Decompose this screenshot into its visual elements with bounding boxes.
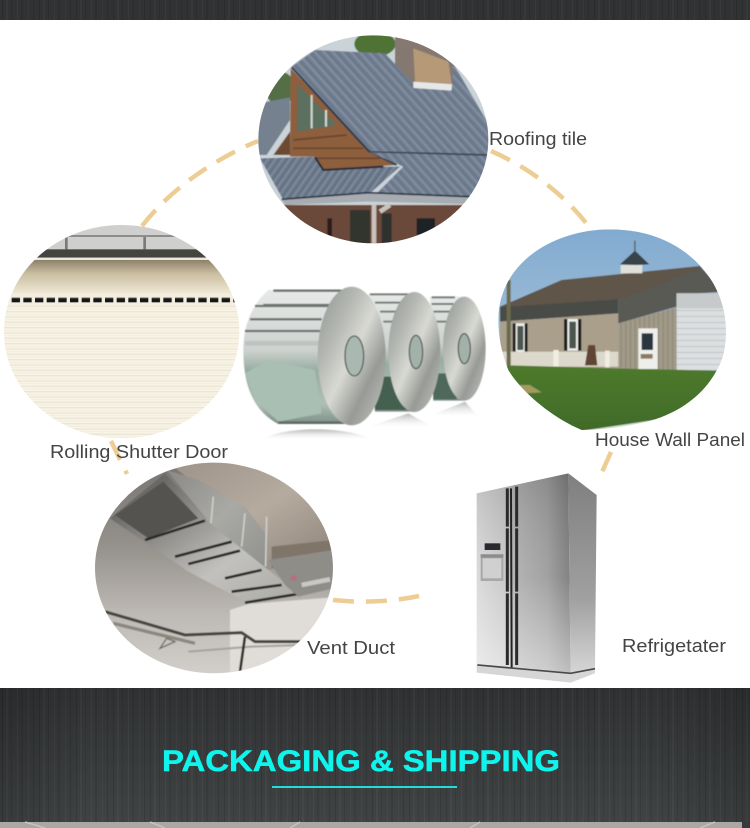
coil 3 bbox=[430, 297, 486, 401]
reflection under coils bbox=[262, 402, 480, 440]
fridge base bbox=[477, 665, 595, 683]
heading underline bbox=[272, 786, 457, 788]
water dispenser bbox=[481, 543, 503, 581]
lower right wall bbox=[230, 597, 332, 677]
fridge side bbox=[568, 473, 597, 682]
coil 1 bbox=[243, 287, 386, 425]
tree top bbox=[354, 35, 396, 56]
label: rolling shutter door: Rolling Shutter Door bbox=[50, 442, 228, 462]
label: roofing tile: Roofing tile bbox=[489, 129, 587, 149]
ceiling bbox=[176, 462, 327, 570]
duct side bbox=[167, 470, 268, 570]
fridge front doors bbox=[477, 473, 571, 682]
photo circle: roofing tile bbox=[253, 30, 493, 250]
coil 2 bbox=[368, 292, 440, 412]
duct underside bbox=[110, 474, 286, 596]
steel coils bbox=[243, 287, 486, 440]
far duct section bbox=[268, 550, 333, 597]
bottom photo strip bbox=[0, 822, 750, 828]
label: house wall panel: House Wall Panel bbox=[595, 430, 745, 450]
refrigerator bbox=[477, 473, 597, 683]
label: refrigerator: Refrigetater bbox=[622, 636, 726, 656]
photo circle: rolling shutter door bbox=[0, 222, 243, 442]
top dark band bbox=[0, 0, 750, 20]
label: vent duct: Vent Duct bbox=[307, 638, 395, 658]
heading: PACKAGING & SHIPPING bbox=[162, 745, 560, 778]
photo circle: house wall panel bbox=[498, 230, 726, 430]
pipes bbox=[105, 612, 305, 642]
photo circle: vent duct bbox=[92, 460, 338, 680]
packaging and shipping banner bbox=[0, 688, 750, 822]
door gap and handles bbox=[507, 487, 517, 668]
left wall bbox=[92, 460, 338, 680]
dashed connecting ring bbox=[111, 141, 611, 602]
